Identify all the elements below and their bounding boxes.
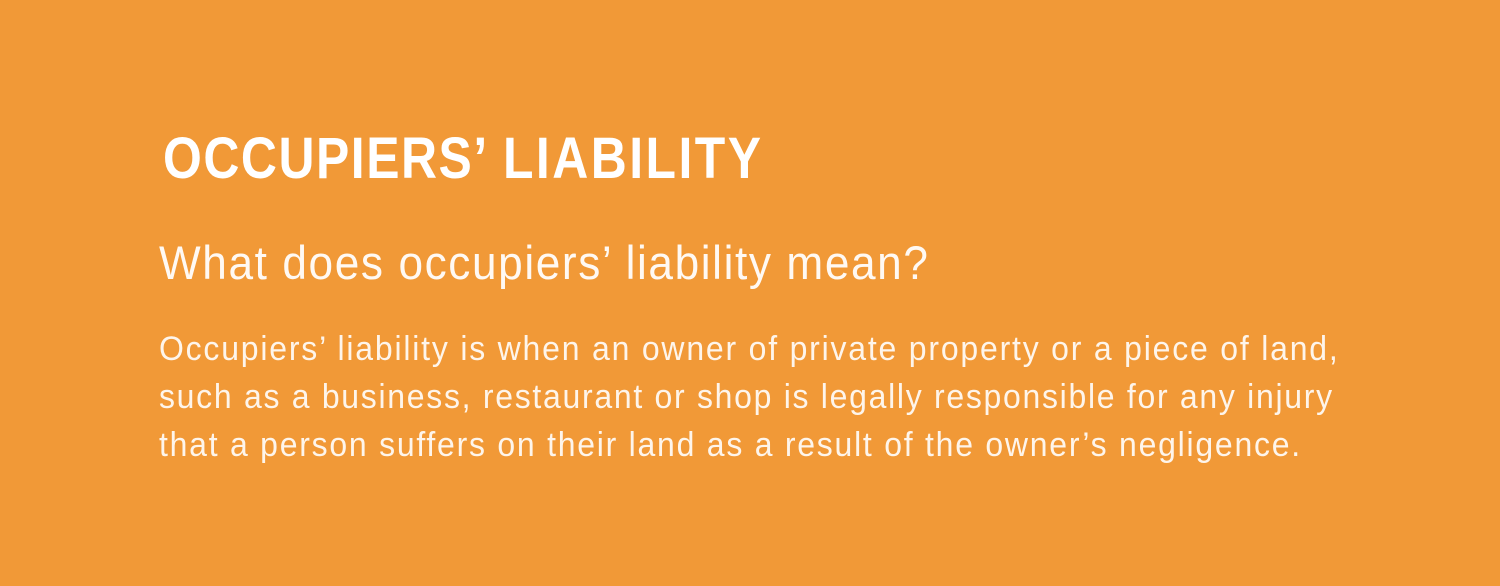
body text: such as a business, restaurant or shop is legally responsible for any injury bbox=[159, 377, 1333, 415]
title bbox=[163, 127, 761, 191]
title: LIABILITY bbox=[503, 127, 761, 191]
subheading: What does occupiers’ liability mean? bbox=[159, 237, 928, 289]
body text bbox=[159, 329, 1338, 463]
title: OCCUPIERS’ bbox=[163, 127, 487, 191]
body text: that a person suffers on their land as a result of the owner’s negligence. bbox=[159, 425, 1300, 463]
body text: Occupiers’ liability is when an owner of private property or a piece of land, bbox=[159, 329, 1338, 367]
